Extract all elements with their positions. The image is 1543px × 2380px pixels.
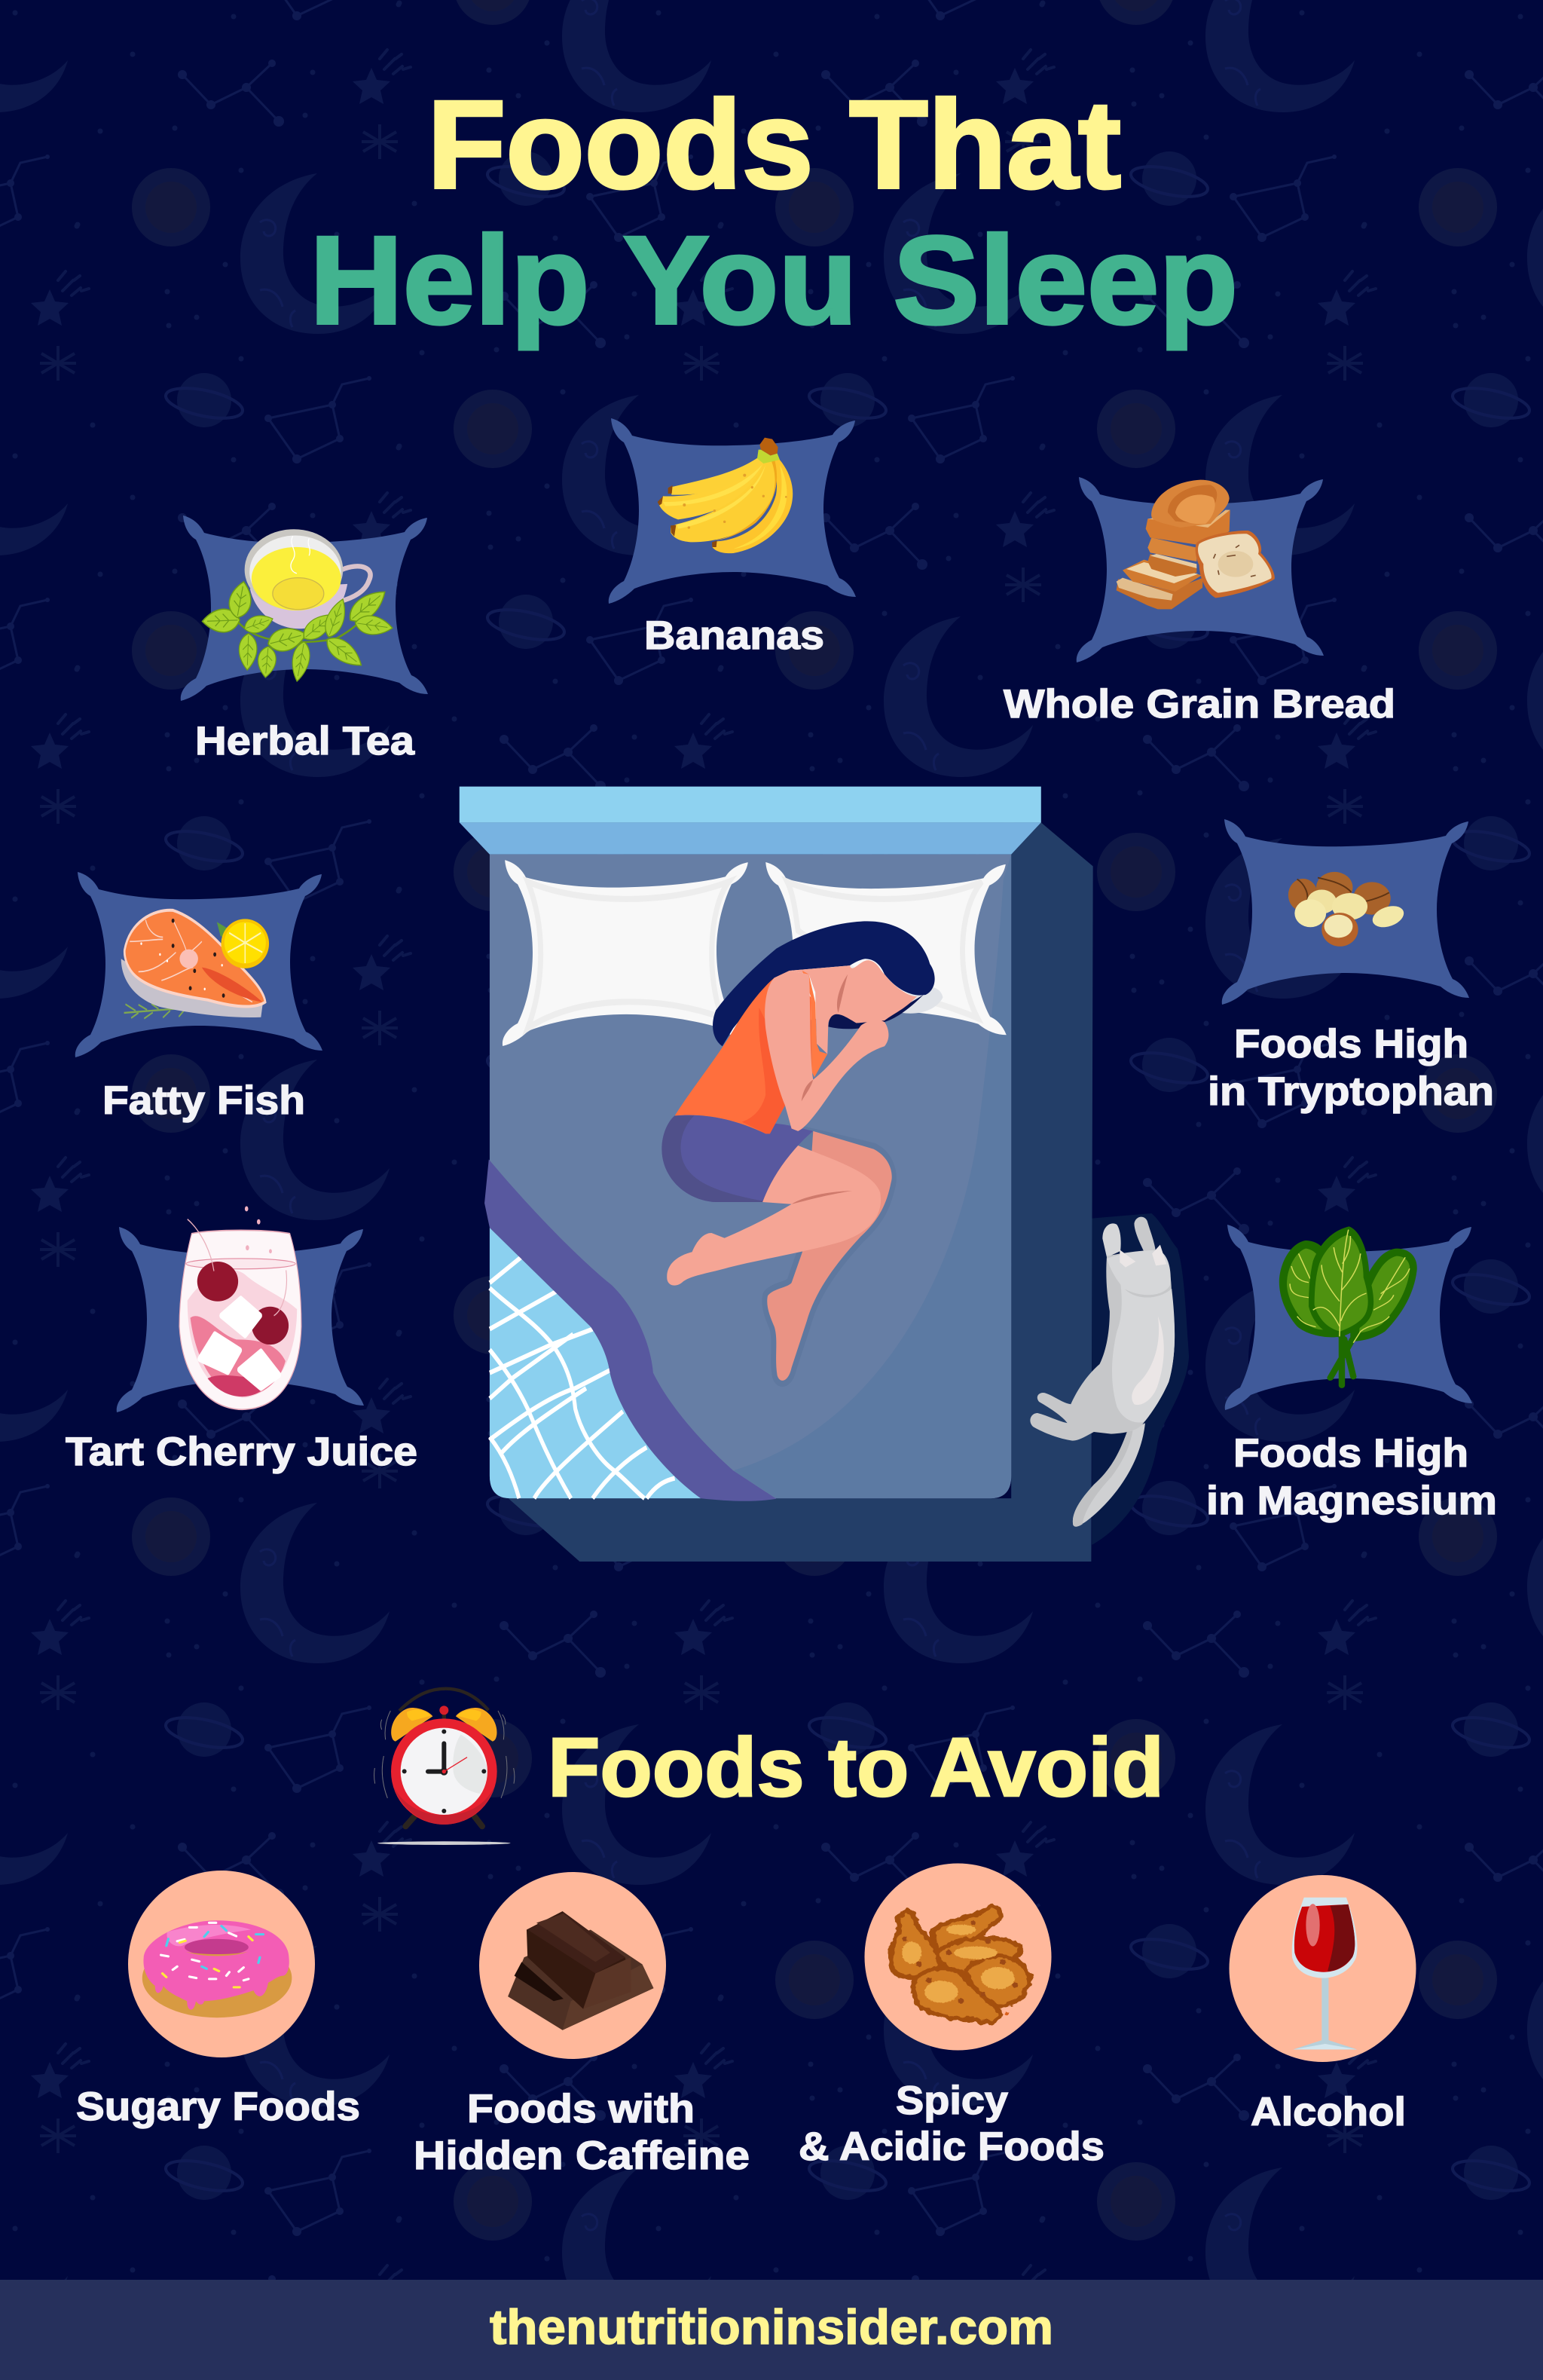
panel: Foods High in Magnesium	[1206, 1225, 1497, 1523]
label: Bananas: Bananas	[644, 613, 824, 658]
label: Spicy & Acidic Foods: Spicy	[896, 2079, 1009, 2123]
label: Spicy & Acidic Foods: & Acidic Foods	[799, 2125, 1105, 2169]
panel: Whole Grain Bread	[1004, 477, 1395, 727]
icon: fried chicken	[891, 1907, 1030, 2023]
panel: Foods High in Tryptophan	[1208, 819, 1494, 1114]
label: Tart Cherry Juice: Tart Cherry Juice	[66, 1430, 417, 1474]
item: Alcohol	[1230, 1875, 1416, 2134]
item: Sugary Foods	[76, 1871, 360, 2129]
label: Alcohol: Alcohol	[1251, 2090, 1406, 2134]
title: Help You Sleep	[310, 211, 1238, 350]
pillows	[503, 860, 1007, 1046]
item: Spicy & Acidic Foods	[799, 1863, 1105, 2169]
bed frame	[509, 822, 1093, 1562]
label: Spicy & Acidic Foods	[799, 2079, 1105, 2169]
footer bar	[0, 2280, 1543, 2380]
label: Foods High in Tryptophan: Foods High	[1234, 1022, 1468, 1066]
panel: Tart Cherry Juice	[66, 1207, 417, 1474]
panel: Fatty Fish	[75, 872, 322, 1123]
title	[310, 75, 1238, 350]
illustration: bed with sleeping woman	[460, 787, 1093, 1562]
mattress	[490, 855, 1011, 1498]
label: Whole Grain Bread: Whole Grain Bread	[1004, 682, 1395, 727]
label: Foods with Hidden Caffeine: Hidden Caffeine	[414, 2134, 750, 2178]
icon: chocolate	[508, 1911, 653, 2030]
label: Fatty Fish: Fatty Fish	[102, 1078, 305, 1123]
icon: herbal tea cup with mint leaves	[202, 529, 394, 683]
icon: cherry juice glass	[179, 1207, 301, 1409]
panel: Bananas	[609, 418, 856, 658]
label: Foods with Hidden Caffeine: Foods with	[467, 2087, 695, 2131]
label: Herbal Tea: Herbal Tea	[195, 719, 415, 763]
blanket with checks	[484, 1159, 776, 1501]
heading: Foods to Avoid	[374, 1689, 1164, 1845]
sleeping woman	[662, 921, 935, 1381]
icon: alarm clock	[374, 1689, 515, 1845]
label: Foods High in Magnesium	[1206, 1431, 1497, 1523]
icon: spinach	[1279, 1226, 1417, 1385]
label: Foods High in Tryptophan: in Tryptophan	[1208, 1069, 1494, 1114]
heading text: Foods to Avoid	[548, 1721, 1164, 1814]
icon: wine glass	[1292, 1898, 1357, 2049]
label: Foods High in Magnesium: in Magnesium	[1206, 1479, 1497, 1523]
icon: donut	[142, 1920, 292, 2017]
label: Foods with Hidden Caffeine	[414, 2087, 750, 2178]
icon: bananas	[658, 438, 793, 553]
title: Foods That	[427, 75, 1121, 215]
label: Sugary Foods: Sugary Foods	[76, 2085, 360, 2129]
icon: bread	[1117, 480, 1275, 609]
item: Foods with Hidden Caffeine	[414, 1872, 750, 2178]
label: Foods High in Magnesium: Foods High	[1233, 1431, 1468, 1476]
label: Foods High in Tryptophan	[1208, 1022, 1494, 1114]
icon: nuts	[1288, 872, 1407, 947]
footer URL: thenutritioninsider.com	[490, 2299, 1053, 2354]
panel: Herbal Tea	[181, 515, 428, 763]
cat shadow on the floor	[1092, 1213, 1189, 1545]
headboard	[460, 787, 1041, 855]
illustration: white cat hanging off the bed	[1030, 1217, 1175, 1527]
icon: salmon steak with lemon	[121, 910, 269, 1018]
